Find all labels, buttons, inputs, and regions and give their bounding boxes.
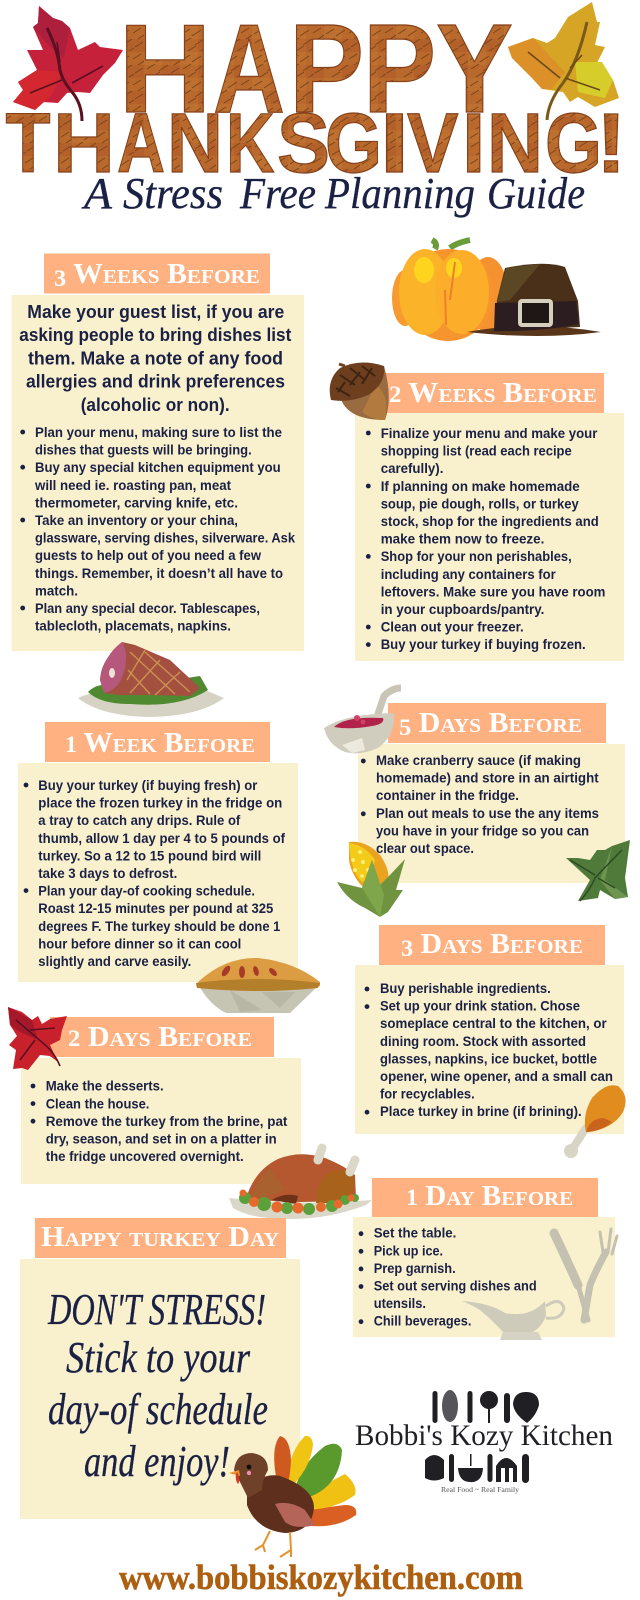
- head: [229, 1453, 268, 1498]
- bullet list: Plan out meals to use the any items: [376, 806, 599, 822]
- bullet list: Finalize your menu and make your: [381, 426, 598, 442]
- title line: THANKSGIVING!: V: [407, 96, 458, 190]
- bullet list: thumb, allow 1 day per 4 to 5 pounds of: [38, 831, 285, 847]
- legs: [255, 1531, 291, 1557]
- panel body: [353, 1217, 615, 1337]
- icon: green leaf: [566, 840, 630, 901]
- bullet list: a tray to catch any drips. Rule of: [38, 813, 241, 829]
- subtitle: Guide: [487, 169, 585, 218]
- tagline: Real Food ~ Real Family: [441, 1485, 519, 1494]
- bullet list: Make cranberry sauce (if making: [376, 753, 581, 769]
- bullet list: Plan any special decor. Tablescapes,: [35, 601, 260, 617]
- title line: THANKSGIVING!: A: [117, 96, 165, 190]
- title line: THANKSGIVING!: !: [596, 96, 626, 190]
- title line: HAPPY: P: [289, 0, 364, 139]
- bullet list: utensils.: [374, 1296, 426, 1312]
- title line: THANKSGIVING!: I: [380, 96, 410, 190]
- title line: HAPPY: [118, 0, 513, 139]
- title line: THANKSGIVING!: N: [167, 96, 223, 190]
- panel: happy turkey day: [20, 1218, 300, 1519]
- heading: 5 days before: 5: [399, 715, 411, 740]
- pilgrim hat: [467, 264, 601, 336]
- bullet list: Set out serving dishes and: [374, 1278, 537, 1294]
- bullet list: opener, wine opener, and a small can: [380, 1069, 613, 1085]
- heading: 3 weeks before: 3: [54, 266, 66, 291]
- icon: cranberry bowl: [324, 688, 401, 753]
- heading: 3 days before: Days Before: [413, 929, 583, 960]
- message: don't stress: [47, 1285, 268, 1486]
- title line: THANKSGIVING!: G: [545, 96, 602, 190]
- panel body: [358, 744, 625, 883]
- panel body: [20, 1259, 300, 1519]
- bullet list: make them now to freeze.: [381, 532, 544, 548]
- icon: pie: [196, 958, 320, 1013]
- bullet list: dry, season, and set in on a platter in: [46, 1132, 277, 1148]
- message: don't stress: Stick to your: [66, 1333, 251, 1382]
- bullet list: [366, 426, 605, 653]
- panel body: [355, 413, 624, 661]
- bullet list: slightly and carve easily.: [38, 954, 191, 970]
- icons: top utensil row: [432, 1390, 539, 1423]
- icon: acorn: [330, 362, 389, 420]
- panel body: [18, 763, 298, 982]
- bullet list: Make the desserts.: [46, 1079, 164, 1095]
- bullet list: homemade) and store in an airtight: [376, 771, 599, 787]
- lead text: Make your guest list, if you are: [27, 301, 284, 322]
- icon: chicken drumstick: [564, 1085, 626, 1158]
- icon: red leaf: [8, 1007, 67, 1070]
- icon: roast turkey on platter: [229, 1148, 372, 1219]
- bullet list: [31, 1079, 288, 1165]
- heading: happy turkey day: [35, 1218, 286, 1258]
- bullet list: clear out space.: [376, 841, 474, 857]
- bullet list: dining room. Stock with assorted: [380, 1034, 586, 1050]
- bullet list: guests to help out of you need a few: [35, 548, 262, 564]
- bullet list: someplace central to the kitchen, or: [380, 1016, 607, 1032]
- bullet list: hour before dinner so it can cool: [38, 936, 241, 952]
- subtitle: Stress: [123, 169, 223, 218]
- bullet list: Chill beverages.: [374, 1314, 471, 1330]
- bullet list: things. Remember, it doesn’t all have to: [35, 566, 283, 582]
- panel: 1 week before: [18, 722, 298, 982]
- heading: 2 weeks before: [385, 373, 604, 413]
- title line: THANKSGIVING!: H: [53, 96, 115, 190]
- heading: 1 day before: [372, 1178, 598, 1218]
- lead text: asking people to bring dishes list: [19, 324, 291, 345]
- bullet list: you have in your fridge so you can: [376, 823, 589, 839]
- title line: THANKSGIVING!: I: [462, 96, 485, 190]
- panel: 2 weeks before: [355, 373, 624, 661]
- bullet list: will need ie. roasting pan, meat: [34, 478, 231, 494]
- bullet list: Place turkey in brine (if brining).: [380, 1104, 582, 1120]
- icon: turkey: [229, 1436, 356, 1557]
- title line: THANKSGIVING!: N: [487, 96, 543, 190]
- bullet list: including any containers for: [381, 567, 556, 583]
- subtitle: A: [81, 169, 113, 218]
- icon: gravy boat: [462, 1301, 564, 1340]
- bullet list: Buy your turkey if buying frozen.: [381, 637, 586, 653]
- title line: HAPPY: H: [118, 0, 212, 139]
- website footer: www.bobbiskozykitchen.com: [119, 1558, 523, 1597]
- heading: 1 week before: 1 Week Before: [65, 728, 255, 759]
- title line: THANKSGIVING!: K: [226, 96, 274, 190]
- title line: THANKSGIVING!: T: [6, 96, 50, 190]
- panel: 1 day before: [353, 1178, 617, 1340]
- heading: 1 day before: 1 Day Before: [406, 1181, 573, 1212]
- panel body: [355, 965, 624, 1134]
- panel: 3 weeks before: [12, 254, 304, 651]
- bullet list: container in the fridge.: [376, 788, 519, 804]
- pumpkin: [392, 240, 508, 341]
- bullet list: [361, 753, 599, 857]
- heading: 3 days before: 3: [401, 936, 413, 961]
- bullet list: [20, 425, 295, 635]
- bullet list: Buy perishable ingredients.: [380, 981, 551, 997]
- bullet list: match.: [35, 583, 78, 599]
- bullet list: glasses, napkins, ice bucket, bottle: [380, 1051, 597, 1067]
- panel: 3 days before: [355, 925, 624, 1134]
- title line: THANKSGIVING!: S: [277, 96, 330, 190]
- bullet list: Plan your day-of cooking schedule.: [38, 884, 255, 900]
- bullet list: carefully).: [381, 461, 443, 477]
- icon: carving knife and fork: [554, 1229, 617, 1320]
- bullet list: Prep garnish.: [374, 1261, 456, 1277]
- bullet list: shopping list (read each recipe: [381, 444, 572, 460]
- bullet list: glassware, serving dishes, silverware. Ask: [35, 531, 295, 547]
- bullet list: the fridge uncovered overnight.: [46, 1149, 244, 1165]
- lead text: allergies and drink preferences: [26, 371, 285, 392]
- icon: pumpkin and pilgrim hat: [392, 240, 601, 341]
- tail feathers: [274, 1436, 356, 1526]
- bullet list: Buy your turkey (if buying fresh) or: [38, 778, 258, 794]
- bullet list: place the frozen turkey in the fridge on: [38, 796, 282, 812]
- lead text: [19, 301, 291, 415]
- bullet list: [24, 778, 285, 970]
- bullet list: Buy any special kitchen equipment you: [35, 460, 281, 476]
- bullet list: Set up your drink station. Chose: [380, 999, 580, 1015]
- bullet list: Remove the turkey from the brine, pat: [46, 1114, 288, 1130]
- bullet list: leftovers. Make sure you have room: [381, 584, 605, 600]
- wing: [275, 1503, 315, 1527]
- bullet list: Pick up ice.: [374, 1243, 443, 1259]
- subtitle: Planning: [324, 169, 475, 218]
- message: don't stress: DON'T STRESS!: [47, 1285, 266, 1334]
- bullet list: tablecloth, placemats, napkins.: [35, 619, 231, 635]
- bullet list: If planning on make homemade: [381, 479, 580, 495]
- bullet list: take 3 days to defrost.: [38, 866, 177, 882]
- message: don't stress: day-of schedule: [48, 1385, 268, 1434]
- icons: bottom utensil row: [425, 1454, 529, 1483]
- bullet list: Take an inventory or your china,: [35, 513, 238, 529]
- heading: 5 days before: [388, 703, 606, 743]
- bullet list: Roast 12-15 minutes per pound at 325: [38, 901, 273, 917]
- panel body: [21, 1058, 301, 1184]
- lead text: them. Make a note of any food: [28, 347, 283, 368]
- logo: Bobbi's Kozy Kitchen: [355, 1390, 613, 1494]
- heading: 5 days before: Days Before: [411, 708, 582, 739]
- bullet list: degrees F. The turkey should be done 1: [38, 919, 280, 935]
- icon: corn: [337, 842, 405, 917]
- bullet list: stock, shop for the ingredients and: [381, 514, 599, 530]
- title line: HAPPY: A: [213, 0, 285, 139]
- icon: yellow maple leaf: [508, 2, 619, 120]
- bullet list: for recyclables.: [380, 1087, 475, 1103]
- bullet list: soup, pie dough, rolls, or turkey: [381, 496, 579, 512]
- heading: 2 days before: 2 Days Before: [68, 1022, 252, 1053]
- bullet list: Clean the house.: [46, 1096, 149, 1112]
- bullet list: Shop for your non perishables,: [381, 549, 572, 565]
- subtitle: [81, 169, 585, 218]
- title line: HAPPY: P: [363, 0, 436, 139]
- heading: 2 weeks before: 2 Weeks Before: [389, 378, 597, 409]
- title line: THANKSGIVING!: [6, 96, 626, 190]
- title line: HAPPY: Y: [436, 0, 513, 139]
- bullet list: Set the table.: [374, 1226, 456, 1242]
- bullet list: Plan your menu, making sure to list the: [35, 425, 282, 441]
- subtitle: Free: [239, 169, 316, 218]
- bullet list: Clean out your freezer.: [381, 620, 524, 636]
- panel: 2 days before: [21, 1017, 301, 1184]
- message: don't stress: and enjoy!: [84, 1437, 230, 1486]
- bullet list: [365, 981, 613, 1120]
- icon: ham on plate: [78, 642, 224, 717]
- heading: 3 weeks before: Weeks Before: [66, 259, 260, 290]
- title: [6, 0, 626, 218]
- heading: happy turkey day: Happy turkey Day: [41, 1222, 280, 1253]
- title line: THANKSGIVING!: G: [325, 96, 382, 190]
- bullet list: in your cupboards/pantry.: [381, 602, 544, 618]
- heading: 1 week before: [45, 722, 270, 762]
- heading: 3 days before: [379, 925, 605, 965]
- heading: 3 weeks before: [44, 254, 270, 294]
- body: [247, 1475, 314, 1533]
- bullet list: [359, 1226, 537, 1330]
- brand name: Bobbi's Kozy Kitchen: [355, 1419, 613, 1452]
- bullet list: turkey. So a 12 to 15 pound bird will: [38, 848, 261, 864]
- bullet list: dishes that guests will be bringing.: [35, 443, 252, 459]
- heading: 2 days before: [50, 1017, 274, 1057]
- lead text: (alcoholic or non).: [81, 394, 230, 415]
- panel: 5 days before: [358, 703, 625, 883]
- bullet list: thermometer, carving knife, etc.: [35, 495, 238, 511]
- panel body: [12, 295, 304, 651]
- icon: red maple leaf: [13, 6, 123, 121]
